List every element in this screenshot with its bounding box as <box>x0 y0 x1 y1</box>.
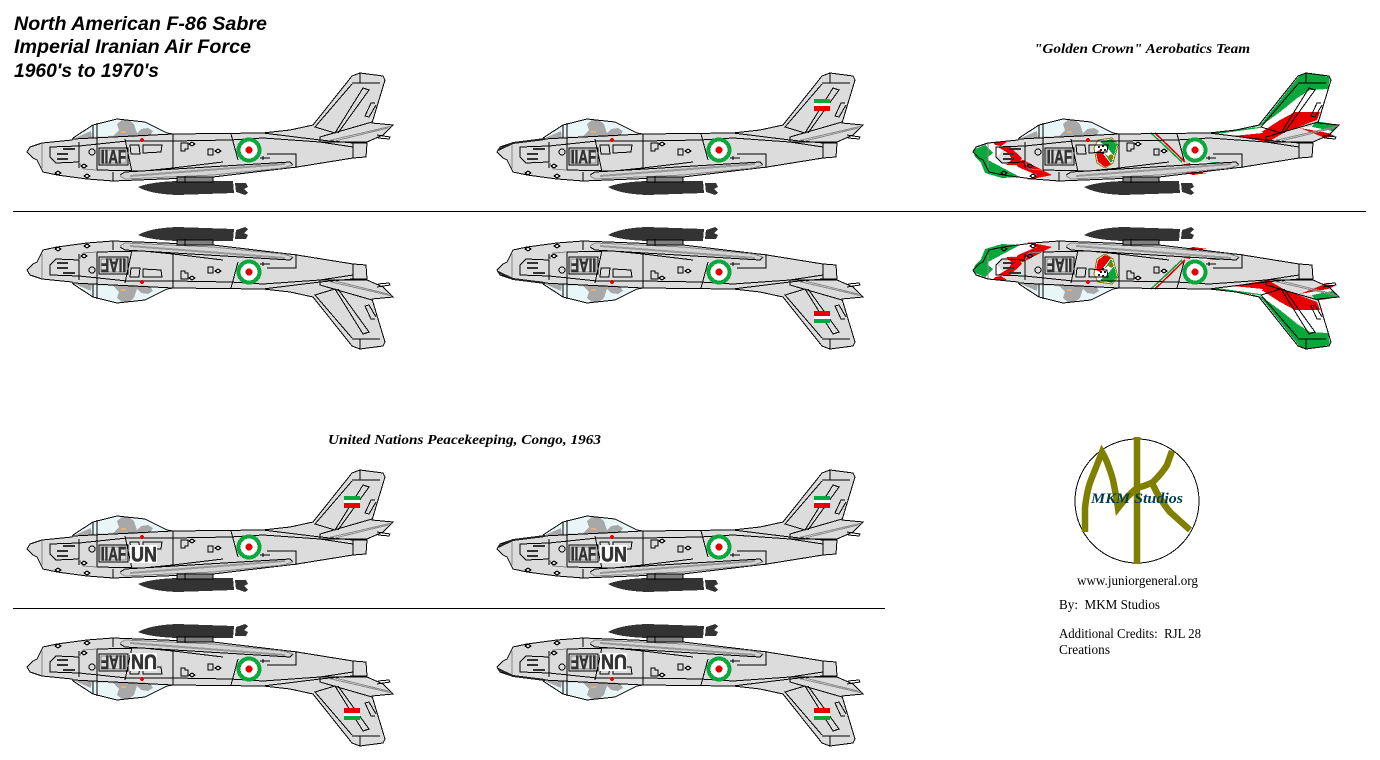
jet: UN top view 1 <box>27 470 393 592</box>
jet: standard top view 2 with tail flag <box>497 73 863 195</box>
credits <box>1059 597 1201 657</box>
roundel <box>1182 138 1208 162</box>
website: www.juniorgeneral.org <box>1077 573 1198 588</box>
marking: UN: UN <box>131 650 157 672</box>
jet: UN top view 2 <box>497 470 863 592</box>
credits: Creations <box>1059 642 1110 657</box>
marking: IIAF: IIAF <box>101 148 126 168</box>
caption: Golden Crown team: "Golden Crown" Aerobatics Team <box>1034 42 1250 57</box>
roundel <box>236 656 262 682</box>
marking: UN: UN <box>131 544 157 566</box>
credits: By: MKM Studios <box>1059 597 1160 612</box>
credits: Additional Credits: RJL 28 <box>1059 626 1201 641</box>
title: Imperial Iranian Air Force <box>14 37 251 58</box>
marking: IIAF: IIAF <box>571 544 596 566</box>
marking: IIAF: IIAF <box>101 650 126 672</box>
jet: Golden Crown flipped view <box>973 227 1339 349</box>
marking: IIAF: IIAF <box>1047 254 1072 274</box>
jet: UN flipped view 1 <box>27 624 393 746</box>
marking: IIAF: IIAF <box>571 148 596 168</box>
marking: IIAF: IIAF <box>571 254 596 274</box>
marking: UN: UN <box>601 544 627 566</box>
title: North American F-86 Sabre <box>14 14 267 35</box>
roundel <box>236 260 262 284</box>
roundel <box>706 534 732 560</box>
marking: UN: UN <box>601 650 627 672</box>
jet: standard top view 1 <box>27 73 393 195</box>
tail flag <box>814 99 830 111</box>
roundel <box>1182 260 1208 284</box>
roundel <box>706 260 732 284</box>
tail flag <box>814 496 830 508</box>
jet: standard flipped view 2 with tail flag <box>497 227 863 349</box>
logo: MKM Studios: MKM Studios <box>1090 491 1183 507</box>
marking: IIAF: IIAF <box>1047 148 1072 168</box>
marking: IIAF: IIAF <box>571 650 596 672</box>
roundel <box>706 138 732 162</box>
tail flag <box>814 708 830 720</box>
jet: Golden Crown top view <box>973 73 1339 195</box>
marking: IIAF: IIAF <box>101 254 126 274</box>
marking: IIAF: IIAF <box>101 544 126 566</box>
aerobatic livery <box>973 73 1339 180</box>
jet: UN flipped view 2 <box>497 624 863 746</box>
roundel <box>236 138 262 162</box>
title <box>14 14 267 82</box>
jet: standard flipped view 1 <box>27 227 393 349</box>
roundel <box>706 656 732 682</box>
title: 1960's to 1970's <box>14 61 159 82</box>
tail flag <box>344 496 360 508</box>
logo: MKM Studios <box>1075 437 1199 564</box>
tail flag <box>344 708 360 720</box>
roundel <box>236 534 262 560</box>
tail flag <box>814 311 830 323</box>
caption: UN peacekeeping: United Nations Peacekeeping, Congo, 1963 <box>328 433 601 448</box>
aerobatic livery <box>973 242 1339 349</box>
